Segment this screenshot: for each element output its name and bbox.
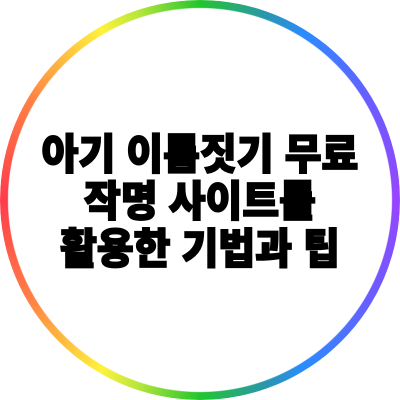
title line 1: 아기 이름짓기 무료 [42, 132, 358, 178]
title line 3: 활용한 기법과 팁 [60, 226, 340, 273]
title line 2: 작명 사이트를 [84, 179, 316, 225]
title [42, 132, 358, 273]
